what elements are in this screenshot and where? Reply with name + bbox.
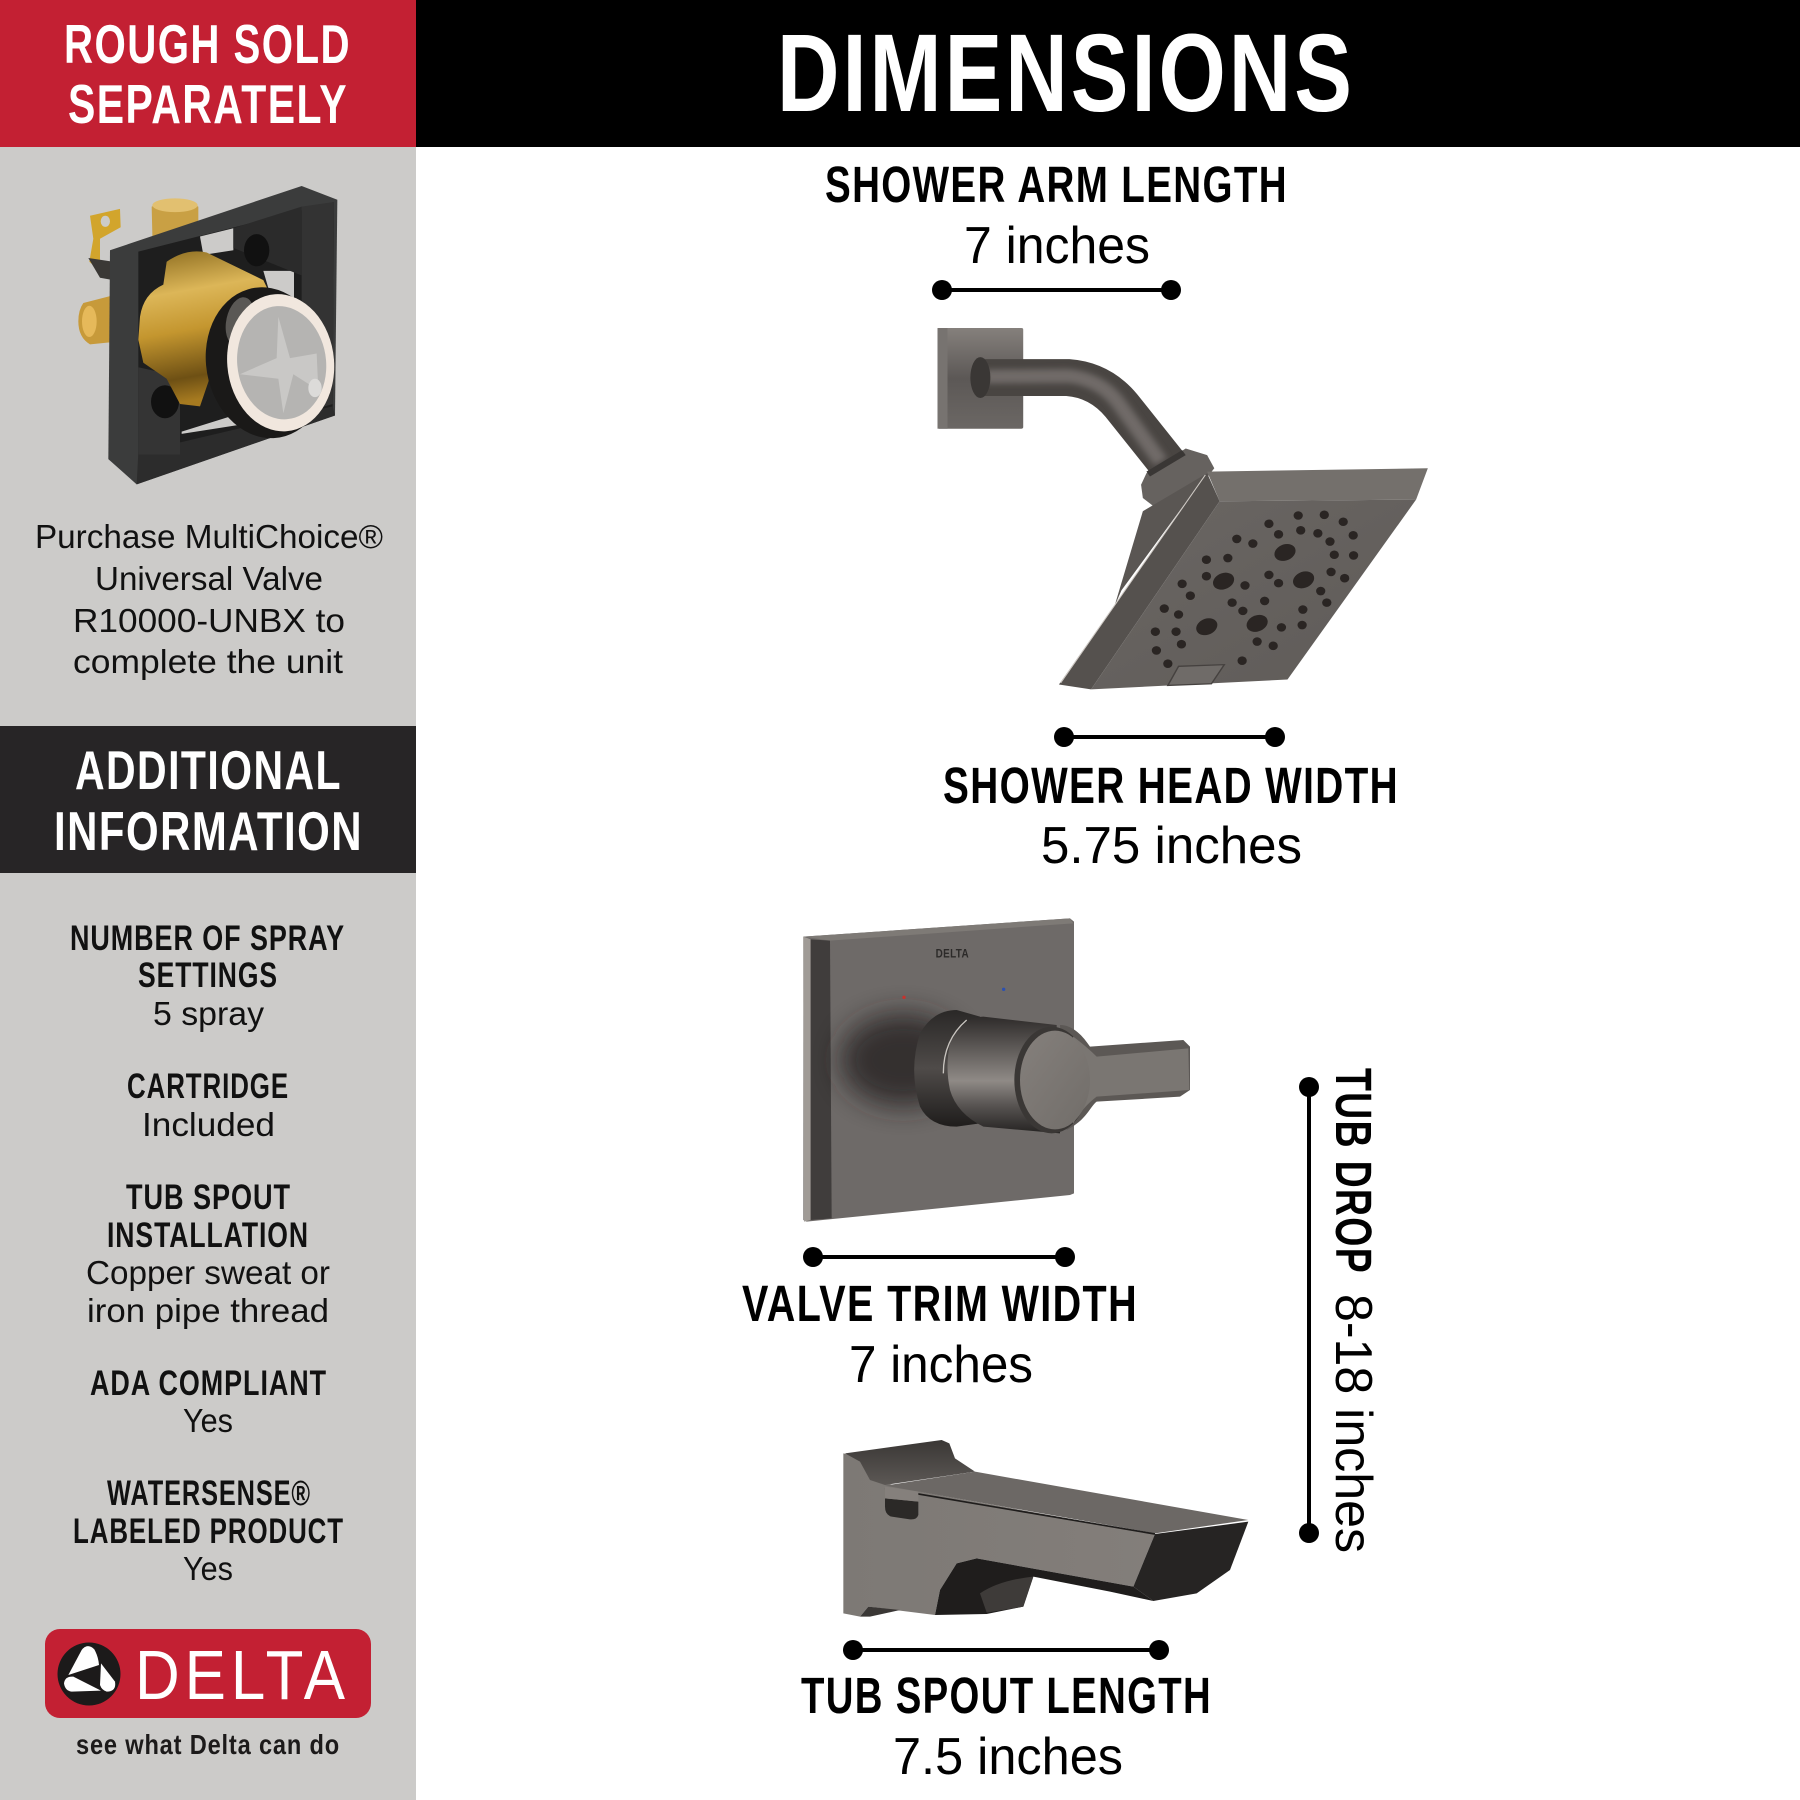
banner: rough sold separately — [0, 0, 416, 147]
panel: left sidebar — [0, 0, 416, 1800]
text block: purchase note — [35, 518, 383, 680]
spec: tub spout installation: INSTALLATION — [107, 1216, 309, 1255]
spec: spray settings — [70, 919, 345, 1032]
text block: purchase note: Universal Valve — [95, 560, 323, 597]
logo: delta — [45, 1629, 371, 1760]
label: shower arm length — [825, 156, 1288, 275]
label: shower head width — [943, 757, 1399, 875]
text block: purchase note: R10000-UNBX to — [73, 602, 345, 639]
dimension bar: shower arm — [932, 280, 1181, 300]
header: dimensions — [416, 0, 1800, 147]
dimension bar: tub spout — [843, 1640, 1169, 1660]
spec: tub spout installation — [86, 1178, 330, 1329]
banner: rough sold separately: SEPARATELY — [68, 73, 348, 135]
label: tub spout length — [801, 1667, 1212, 1786]
logo: delta: see what Delta can do — [76, 1729, 340, 1760]
spec: spray settings: 5 spray — [153, 995, 265, 1032]
logo: delta: DELTA — [135, 1636, 350, 1714]
label: shower arm length: SHOWER ARM LENGTH — [825, 156, 1288, 213]
spec: spray settings: SETTINGS — [138, 956, 278, 995]
text block: purchase note: Purchase MultiChoice® — [35, 518, 383, 555]
dimension bar: shower head — [1054, 727, 1285, 747]
heading: additional information — [0, 726, 416, 873]
spec: watersense — [73, 1474, 344, 1587]
spec: spray settings: NUMBER OF SPRAY — [70, 919, 345, 958]
label: shower head width: 5.75 inches — [1041, 817, 1302, 875]
text block: purchase note: complete the unit — [73, 643, 343, 680]
dimension bar: valve trim — [803, 1247, 1075, 1267]
spec: watersense: Yes — [183, 1550, 233, 1587]
spec: cartridge: Included — [142, 1106, 275, 1143]
spec: tub spout installation: Copper sweat or — [86, 1254, 330, 1291]
label: tub drop: 8-18 inches — [1324, 1294, 1382, 1553]
icon: shower head and arm — [937, 328, 1428, 689]
spec: watersense: WATERSENSE® — [107, 1474, 311, 1513]
label: valve trim width: 7 inches — [849, 1336, 1033, 1394]
label: shower head width: SHOWER HEAD WIDTH — [943, 757, 1399, 814]
spec: ada compliant: Yes — [183, 1402, 233, 1439]
banner: rough sold separately: ROUGH SOLD — [64, 13, 351, 75]
title: DIMENSIONS — [777, 12, 1355, 135]
icon: valve trim and handle — [803, 918, 1190, 1222]
spec: ada compliant: ADA COMPLIANT — [90, 1364, 327, 1403]
icon: valve trim and handle: DELTA — [936, 946, 969, 960]
label: tub spout length: 7.5 inches — [893, 1728, 1123, 1786]
spray holes — [1151, 511, 1358, 668]
icon: rough-in valve — [78, 186, 347, 484]
spec: watersense: LABELED PRODUCT — [73, 1512, 344, 1551]
label: valve trim width: VALVE TRIM WIDTH — [742, 1275, 1138, 1332]
spec: cartridge: CARTRIDGE — [127, 1067, 289, 1106]
spec: tub spout installation: TUB SPOUT — [126, 1178, 291, 1217]
heading: additional information: INFORMATION — [54, 800, 363, 862]
icon: tub spout — [843, 1440, 1248, 1617]
dimension bar: tub drop — [1299, 1077, 1319, 1543]
spec: ada compliant — [90, 1364, 327, 1439]
label: valve trim width — [742, 1275, 1138, 1394]
label: tub spout length: TUB SPOUT LENGTH — [801, 1667, 1212, 1724]
label: shower arm length: 7 inches — [964, 217, 1150, 275]
label: tub drop — [1324, 1068, 1382, 1553]
label: tub drop: TUB DROP — [1325, 1068, 1382, 1274]
heading: additional information: ADDITIONAL — [75, 739, 342, 801]
spec: cartridge — [127, 1067, 289, 1143]
spec: tub spout installation: iron pipe thread — [87, 1292, 329, 1329]
